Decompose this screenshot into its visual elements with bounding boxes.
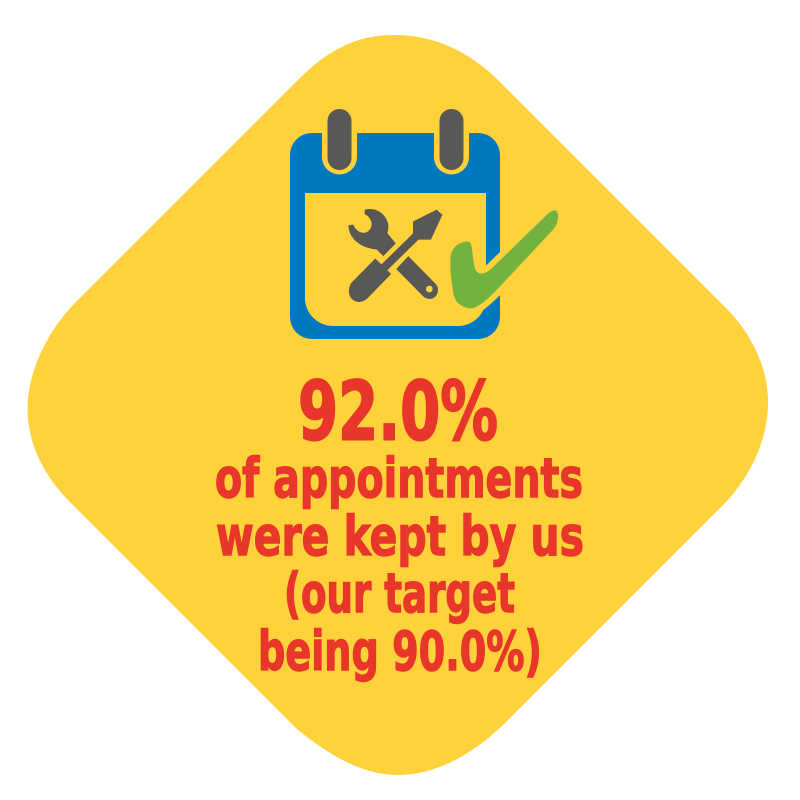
line 4: being 90.0%) <box>258 620 542 683</box>
wrench handle <box>397 257 438 299</box>
calendar ring left <box>322 109 357 174</box>
text block: description <box>215 447 584 683</box>
calendar body <box>290 133 500 339</box>
screwdriver blade and shaft <box>382 210 442 270</box>
wrench head <box>349 209 395 256</box>
calendar ring right <box>434 109 469 174</box>
heading: 92.0%: 92.0% <box>298 366 498 460</box>
icon: crossed wrench and screwdriver <box>349 209 442 302</box>
line 3: (our target <box>284 562 515 625</box>
calendar page <box>305 193 486 326</box>
line 1: of appointments <box>215 447 583 510</box>
icon: calendar with tools and check mark <box>290 109 558 339</box>
screwdriver handle <box>349 259 391 302</box>
icon: green check mark <box>450 210 558 308</box>
line 2: were kept by us <box>216 505 584 568</box>
